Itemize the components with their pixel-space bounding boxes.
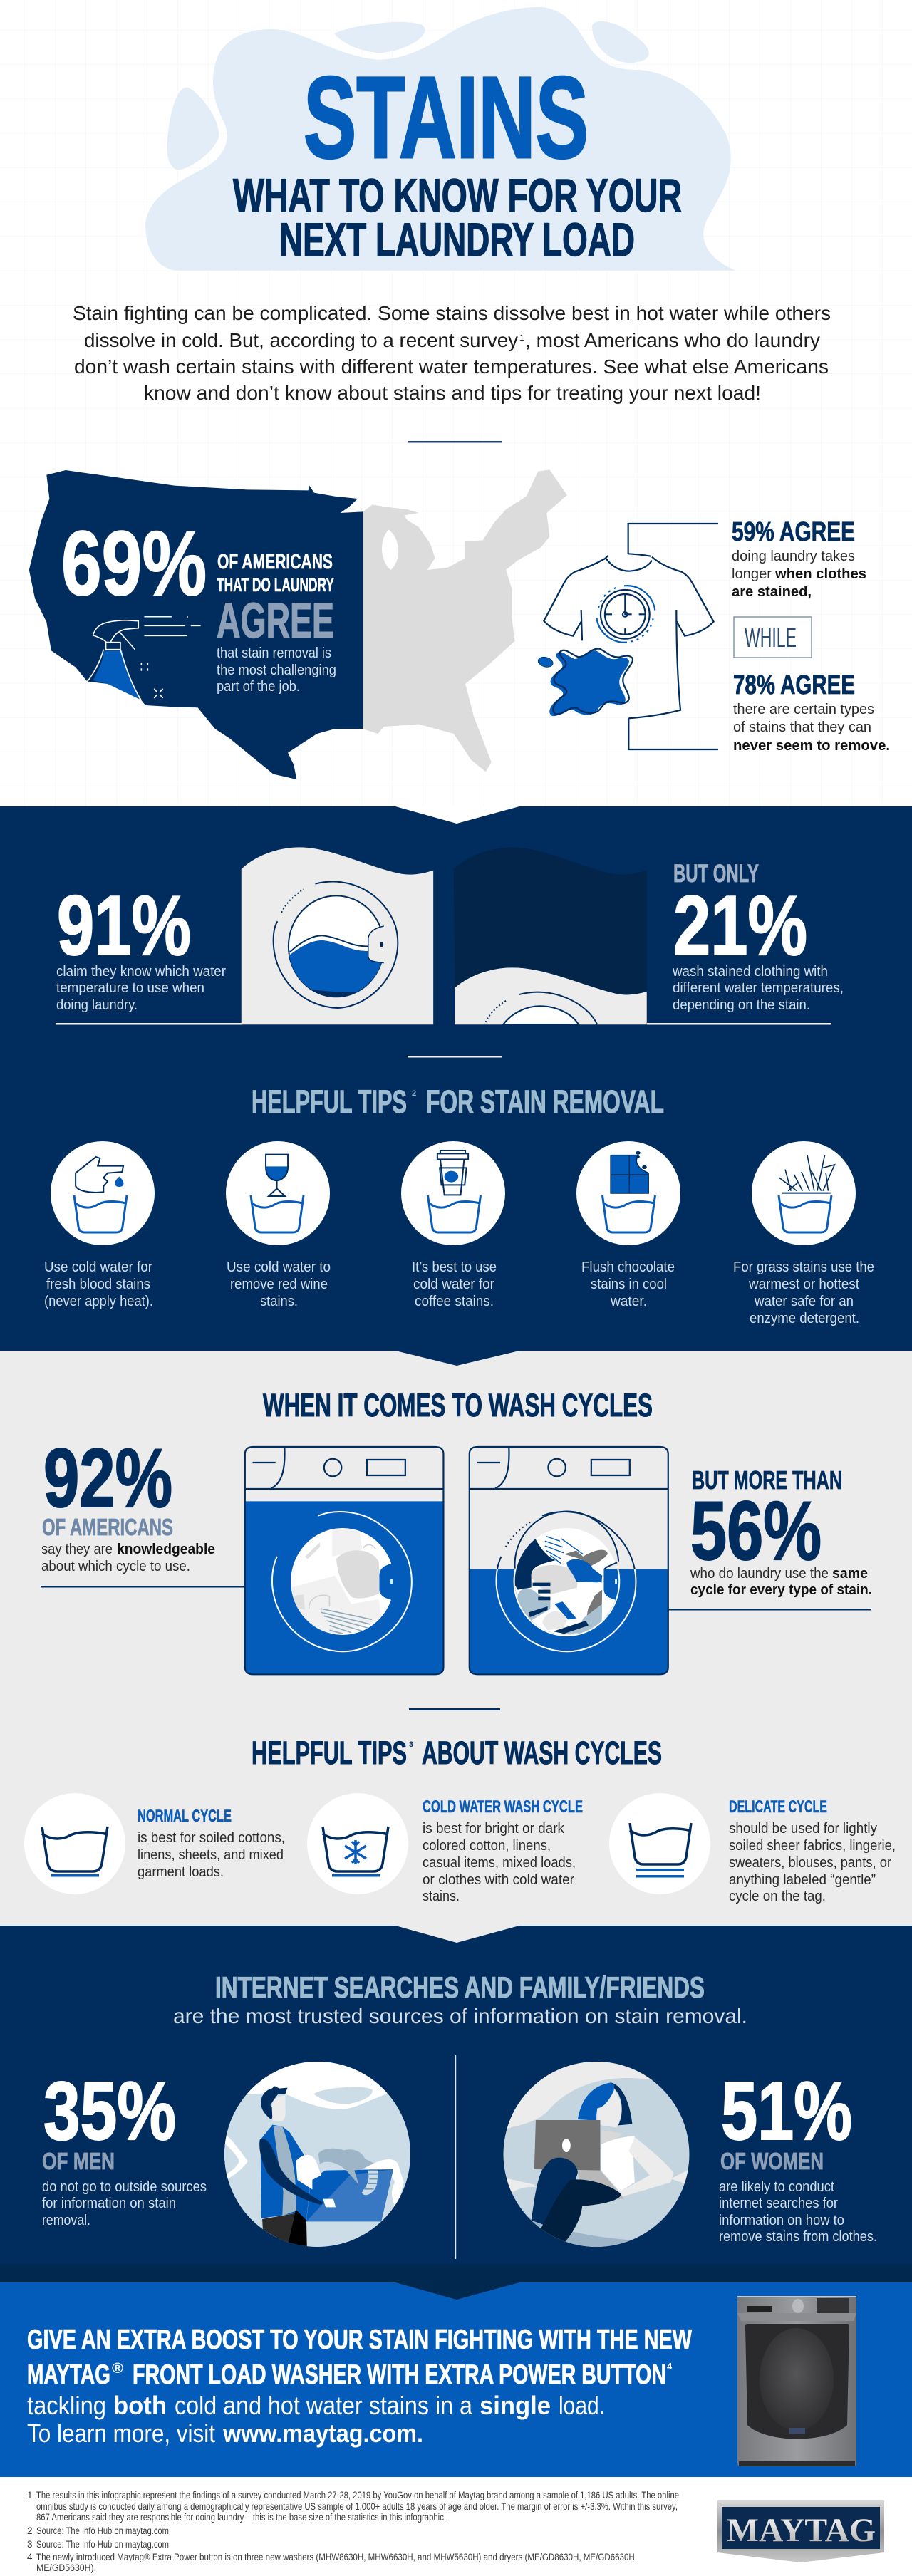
US map: [29, 469, 567, 779]
panel: water temperature: [0, 806, 912, 1351]
stat: 35% of men: removal.: [42, 2213, 90, 2228]
header blob background: [145, 7, 736, 271]
cta text: cold and hot water stains in a: [175, 2391, 473, 2420]
footnotes: Source: The Info Hub on maytag.com: [36, 2539, 169, 2550]
illustration: washer door half full: [242, 847, 433, 1024]
footnotes: 867 Americans said they are responsible for doing laundry – this is the base size of the statistics in this infographic.: [36, 2512, 446, 2523]
stat: 51% of women: information on how to: [719, 2213, 844, 2228]
stain: [537, 649, 633, 716]
tip: blood stains: fresh blood stains: [46, 1277, 150, 1292]
stat: 35% of men: do not go to outside sources: [42, 2179, 207, 2195]
logo: Maytag: [717, 2500, 884, 2562]
stat: 21%: BUT ONLY: [673, 860, 759, 888]
heading: helpful tips for stain removal: FOR STAIN REMOVAL: [426, 1084, 664, 1120]
tip: coffee: [401, 1141, 505, 1309]
stat: 51% of women: [719, 2065, 877, 2245]
stat: 69% of Americans: 69%: [61, 513, 207, 615]
tip: delicate cycle: DELICATE CYCLE: [729, 1797, 827, 1817]
footnotes: The results in this infographic represent the findings of a survey conducted March 27-28, 2019 by YouGov on behalf of Maytag brand among a sample of 1,186 US adults. The online: [36, 2490, 679, 2500]
cta heading: MAYTAG: [27, 2359, 110, 2390]
while box: [734, 617, 812, 658]
tip: grass: warmest or hottest: [748, 1277, 859, 1292]
heading: when it comes to wash cycles: WHEN IT COMES TO WASH CYCLES: [263, 1387, 653, 1423]
tip: cold water wash cycle: COLD WATER WASH CYCLE: [423, 1797, 583, 1817]
stat: 69% of Americans: [61, 513, 336, 695]
intro paragraph: [73, 302, 831, 404]
cta text: tackling: [27, 2391, 106, 2420]
while box: WHILE: [745, 623, 797, 653]
heading: helpful tips about wash cycles: [252, 1735, 662, 1771]
stat: 59% agree: are stained,: [732, 584, 812, 600]
stat: 35% of men: 35%: [43, 2065, 176, 2157]
tip: grass: water safe for an: [754, 1294, 854, 1309]
stat: 35% of men: [42, 2065, 207, 2228]
tip: normal cycle: is best for soiled cottons,: [138, 1830, 285, 1846]
stat: 78% agree: never seem to remove.: [733, 738, 890, 754]
tip: delicate cycle: sweaters, blouses, pants, or: [729, 1855, 891, 1871]
title: WHAT TO KNOW FOR YOUR: [233, 169, 682, 222]
icon: snowflake: [345, 1840, 366, 1864]
heading: helpful tips about wash cycles: ABOUT WASH CYCLES: [422, 1735, 662, 1771]
footnotes: 1: [27, 2490, 33, 2500]
icon: spray bottle: [87, 616, 201, 700]
tip: normal cycle: NORMAL CYCLE: [138, 1807, 232, 1826]
tip: blood stains: Use cold water for: [44, 1260, 152, 1275]
stat: 92%: about which cycle to use.: [41, 1559, 190, 1574]
tip: red wine: stains.: [260, 1294, 298, 1309]
stat: 91%: doing laundry.: [56, 997, 138, 1013]
stat: 91%: claim they know which water: [56, 964, 226, 980]
stat: 69% of Americans: AGREE: [217, 593, 334, 648]
panel: call to action: [0, 2282, 912, 2477]
cta heading: FRONT LOAD WASHER WITH EXTRA POWER BUTTON: [133, 2359, 666, 2390]
cta text: both: [113, 2391, 167, 2420]
stat: 91%: 91%: [57, 878, 191, 973]
cta text: To learn more, visit: [27, 2419, 215, 2448]
intro paragraph: dissolve in cold. But, according to a recent survey: [84, 329, 518, 351]
clock: [596, 586, 655, 643]
illustration: man with laundry basket: [221, 2059, 413, 2249]
stat: 69% of Americans: part of the job.: [217, 679, 300, 695]
cta text: [27, 2391, 605, 2448]
footnotes: omnibus study is conducted daily among a demographically representative US sample of 1,000+ adults 18 years of age and older. The margin of error is +/-3.3%. Within this survey,: [36, 2501, 678, 2512]
tip: cold water wash cycle: [307, 1793, 583, 1904]
panel: trusted sources: [0, 1926, 912, 2282]
tip: coffee: It’s best to use: [412, 1260, 497, 1275]
illustration: stained half washer: [454, 847, 647, 1024]
illustration: Maytag washer: [737, 2296, 856, 2466]
tip: blood stains: [44, 1141, 155, 1309]
stat: 21%: 21%: [673, 878, 807, 973]
stat: 59% agree: doing laundry takes: [732, 549, 855, 564]
intro paragraph: don’t wash certain stains with different water temperatures. See what else Americans: [74, 355, 829, 378]
tip: chocolate: water.: [610, 1294, 647, 1309]
cta text: load.: [559, 2391, 605, 2420]
heading: helpful tips about wash cycles: HELPFUL TIPS: [252, 1735, 407, 1771]
stat: 56%: 56%: [690, 1484, 822, 1577]
stat: 69% of Americans: THAT DO LAUNDRY: [217, 574, 334, 596]
cta text: single: [480, 2391, 551, 2420]
intro paragraph: 1: [519, 333, 524, 343]
cta heading: [27, 2325, 692, 2390]
footnotes: 2: [27, 2525, 33, 2536]
subheading: are the most trusted sources of information on stain removal.: [173, 2005, 747, 2028]
intro paragraph: Stain fighting can be complicated. Some stains dissolve best in hot water while others: [73, 302, 831, 324]
tip: normal cycle: garment loads.: [138, 1864, 224, 1880]
stat: 69% of Americans: OF AMERICANS: [217, 551, 333, 573]
footnotes: 3: [27, 2539, 33, 2550]
stat: 21%: depending on the stain.: [673, 997, 810, 1013]
stat: 56%: [668, 1465, 872, 1610]
stat: 51% of women: OF WOMEN: [720, 2148, 824, 2174]
tip: coffee: coffee stains.: [415, 1294, 494, 1309]
tip: grass: [733, 1141, 874, 1326]
stat: 21%: wash stained clothing with: [672, 964, 828, 980]
tip: chocolate: Flush chocolate: [581, 1260, 675, 1275]
stat: 51% of women: are likely to conduct: [719, 2179, 834, 2195]
stat: 21%: different water temperatures,: [673, 980, 844, 996]
logo: Maytag: MAYTAG: [727, 2512, 876, 2549]
stat: 35% of men: OF MEN: [42, 2148, 115, 2174]
stat: 56%: cycle for every type of stain.: [690, 1582, 872, 1598]
illustration: woman with laptop: [503, 2059, 692, 2249]
heading: helpful tips for stain removal: HELPFUL TIPS: [252, 1084, 407, 1120]
tip: cold water wash cycle: is best for bright or dark: [423, 1821, 565, 1837]
stat: 78% agree: of stains that they can: [733, 720, 871, 735]
stat: 51% of women: remove stains from clothes.: [719, 2229, 877, 2245]
stat: 78% agree: 78% AGREE: [733, 670, 855, 700]
heading: helpful tips for stain removal: [252, 1084, 664, 1120]
tip: delicate cycle: should be used for lightly: [729, 1821, 877, 1837]
tip: cold water wash cycle: colored cotton, linens,: [423, 1838, 551, 1854]
illustration: two washers: [245, 1447, 668, 1674]
footnotes: ME/GD5630H).: [36, 2562, 96, 2573]
intro paragraph: , most Americans who do laundry: [525, 329, 820, 351]
footnotes: The newly introduced Maytag® Extra Power button is on three new washers (MHW8630H, MHW6630H, and MHW5630H) and dryers (ME/GD8630H, ME/GD6630H,: [36, 2552, 637, 2562]
stat: 35% of men: for information on stain: [42, 2196, 176, 2211]
tip: cold water wash cycle: casual items, mixed loads,: [423, 1855, 576, 1871]
tip: grass: For grass stains use the: [733, 1260, 874, 1275]
tip: cold water wash cycle: or clothes with cold water: [423, 1872, 574, 1888]
panel: wash cycles: [0, 1351, 912, 1926]
footnotes: 4: [27, 2552, 33, 2562]
intro paragraph: know and don’t know about stains and tips for treating your next load!: [144, 382, 761, 404]
map: navy western half: [29, 470, 363, 779]
stat: 91%: temperature to use when: [56, 980, 204, 996]
heading: helpful tips for stain removal: 2: [412, 1089, 416, 1098]
tip: coffee: cold water for: [413, 1277, 494, 1292]
tip: delicate cycle: soiled sheer fabrics, lingerie,: [729, 1838, 896, 1854]
stat: 92%: say they are: [41, 1542, 113, 1557]
stat: 91%: [56, 878, 226, 1013]
tip: normal cycle: linens, sheets, and mixed: [138, 1847, 284, 1863]
stat: 78% agree: [733, 670, 890, 754]
stat: 56%: BUT MORE THAN: [692, 1465, 842, 1495]
stat: 92%: 92%: [43, 1431, 172, 1525]
cta heading: 4: [667, 2361, 673, 2372]
tip: grass: enzyme detergent.: [750, 1311, 859, 1326]
tip: normal cycle: [24, 1793, 285, 1894]
stat: 69% of Americans: the most challenging: [217, 663, 336, 678]
washer: half water: [470, 1447, 668, 1674]
title: [233, 52, 682, 266]
stat: 51% of women: 51%: [721, 2065, 852, 2157]
title: STAINS: [304, 52, 589, 182]
tip: delicate cycle: cycle on the tag.: [729, 1889, 826, 1904]
tip: cold water wash cycle: stains.: [423, 1889, 460, 1904]
stat: 59% agree: longer: [732, 566, 772, 582]
cta text: www.maytag.com.: [222, 2419, 423, 2448]
tip: delicate cycle: anything labeled “gentle”: [729, 1872, 876, 1888]
tip: red wine: remove red wine: [230, 1277, 328, 1292]
stat: 59% agree: 59% AGREE: [732, 517, 855, 547]
stat: 51% of women: internet searches for: [719, 2196, 838, 2211]
tip: red wine: [226, 1141, 331, 1309]
stat: 69% of Americans: that stain removal is: [217, 645, 331, 661]
tip: blood stains: (never apply heat).: [44, 1294, 153, 1309]
stat: 92%: OF AMERICANS: [42, 1514, 173, 1540]
stat: 59% agree: [732, 517, 866, 600]
cta heading: GIVE AN EXTRA BOOST TO YOUR STAIN FIGHTING WITH THE NEW: [27, 2325, 692, 2355]
tip: chocolate: [576, 1141, 680, 1309]
title: NEXT LAUNDRY LOAD: [279, 213, 635, 266]
footnotes: Source: The Info Hub on maytag.com: [36, 2525, 169, 2536]
stat: 92%: [41, 1431, 245, 1587]
cta heading: ®: [112, 2361, 123, 2377]
tip: chocolate: stains in cool: [591, 1277, 667, 1292]
stat: 59% agree: when clothes: [774, 566, 866, 582]
heading: helpful tips about wash cycles: 3: [409, 1740, 413, 1749]
footnotes: [27, 2490, 679, 2573]
tip: red wine: Use cold water to: [227, 1260, 331, 1275]
stat: 92%: knowledgeable: [117, 1542, 215, 1557]
stat: 56%: who do laundry use the: [690, 1566, 829, 1582]
stat: 56%: same: [832, 1566, 868, 1582]
tip: delicate cycle: [609, 1793, 896, 1904]
heading: internet searches: INTERNET SEARCHES AND FAMILY/FRIENDS: [215, 1970, 705, 2004]
stat: 21%: [672, 860, 844, 1013]
washer: full of water: [245, 1447, 443, 1674]
map: grey eastern half: [363, 469, 567, 772]
stat: 78% agree: there are certain types: [733, 702, 874, 717]
icon: t-shirt with clock and stain: [537, 524, 718, 749]
